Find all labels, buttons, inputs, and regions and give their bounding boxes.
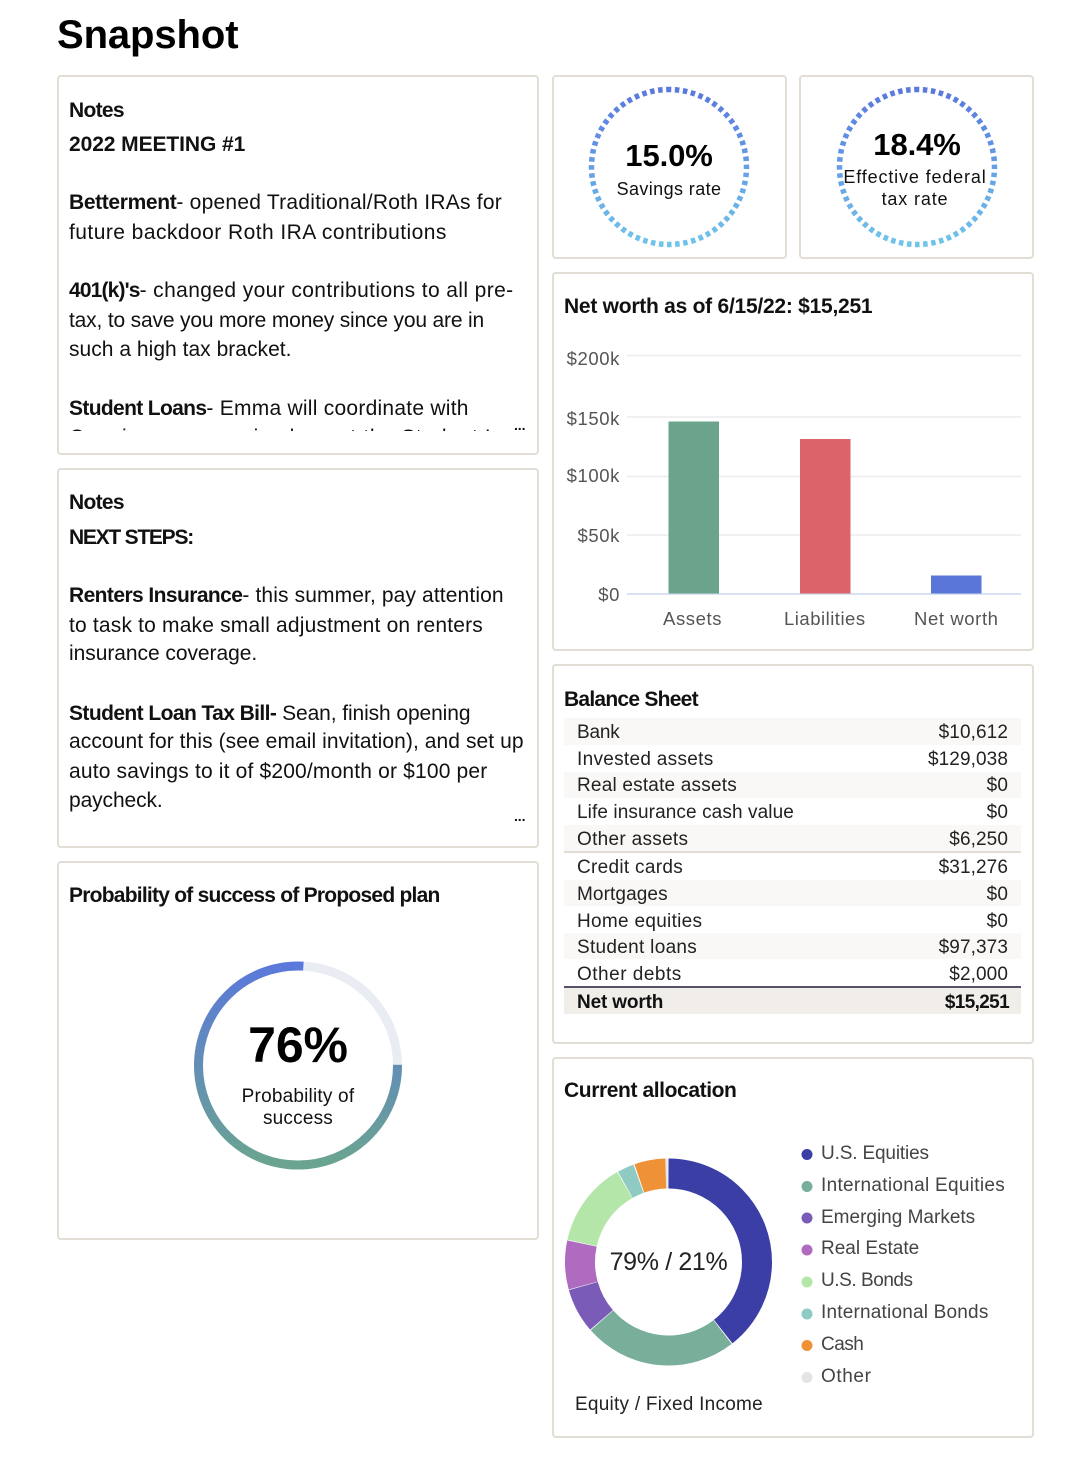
tax rate label: tax rate — [882, 189, 948, 209]
next steps text: Student Loan Tax Bill- Sean, finish opening — [69, 702, 470, 725]
balance sheet table: Other debts — [577, 964, 682, 985]
y axis labels — [566, 348, 620, 605]
meeting notes text: 2022 MEETING #1 — [69, 133, 245, 156]
balance sheet table: $129,038 — [928, 749, 1008, 770]
tax rate ring — [840, 90, 994, 244]
y axis labels: $100k — [567, 465, 620, 486]
meeting notes text: Notes — [69, 99, 124, 122]
next steps text: insurance coverage. — [69, 642, 257, 665]
balance sheet table: $0 — [987, 802, 1008, 823]
next steps text: ... — [514, 808, 525, 824]
ellipsis: ... — [514, 417, 525, 433]
panel: savings rate — [552, 75, 787, 259]
balance sheet table: Real estate assets — [577, 775, 737, 796]
probability label: Probability of — [242, 1086, 354, 1107]
meeting notes text: 401(k)'s- changed your contributions to all pre- — [69, 279, 514, 302]
allocation legend: Emerging Markets — [821, 1207, 975, 1228]
meeting notes text: tax, to save you more money since you are in — [69, 309, 484, 332]
balance sheet table — [564, 718, 1021, 1014]
next steps text: Renters Insurance- this summer, pay attention — [69, 584, 504, 607]
allocation legend: Other — [821, 1366, 872, 1387]
savings rate value: 15.0% — [625, 138, 713, 173]
balance sheet table: $97,373 — [939, 937, 1008, 958]
next steps text — [69, 491, 525, 824]
panel: effective federal tax rate — [799, 75, 1034, 259]
balance sheet table: Home equities — [577, 911, 702, 932]
probability ring — [192, 959, 404, 1172]
y axis labels: $50k — [577, 525, 620, 546]
balance sheet table: $15,251 — [945, 992, 1009, 1013]
bar chart — [627, 356, 1021, 594]
y axis labels: $0 — [598, 584, 620, 605]
probability heading: Probability of success of Proposed plan — [69, 884, 440, 907]
balance sheet table: Mortgages — [577, 884, 668, 905]
tax rate value: 18.4% — [873, 127, 961, 162]
meeting notes text: future backdoor Roth IRA contributions — [69, 221, 447, 244]
x axis labels: Liabilities — [784, 608, 866, 629]
balance sheet table: $2,000 — [949, 964, 1008, 985]
probability value: 76% — [248, 1017, 348, 1073]
tax rate label: Effective federal — [843, 167, 987, 187]
panel: next steps notes — [57, 468, 539, 848]
balance sheet heading: Balance Sheet — [564, 688, 698, 711]
y axis labels: $150k — [567, 408, 620, 429]
balance sheet table: Bank — [577, 722, 620, 743]
bar: liabilities — [800, 439, 850, 594]
allocation legend: International Equities — [821, 1175, 1005, 1196]
allocation legend: International Bonds — [821, 1302, 989, 1323]
allocation legend — [821, 1143, 1005, 1387]
meeting notes text: Betterment- opened Traditional/Roth IRAs for — [69, 191, 502, 214]
savings rate ring — [592, 90, 746, 244]
next steps text: NEXT STEPS: — [69, 526, 193, 549]
balance sheet table: $0 — [987, 884, 1008, 905]
next steps text: auto savings to it of $200/month or $100 per — [69, 760, 487, 783]
balance sheet table: Credit cards — [577, 857, 683, 878]
x axis labels — [663, 608, 999, 629]
donut center label: 79% / 21% — [610, 1248, 727, 1276]
legend dots — [802, 1149, 812, 1383]
balance sheet table: $31,276 — [939, 857, 1008, 878]
panel: meeting notes — [57, 75, 539, 455]
title: Snapshot — [57, 13, 238, 57]
meeting notes text — [69, 99, 535, 431]
allocation legend: Real Estate — [821, 1238, 919, 1259]
balance sheet table: $10,612 — [939, 722, 1008, 743]
meeting notes text: Student Loans- Emma will coordinate with — [69, 397, 469, 420]
next steps text: to task to make small adjustment on renters — [69, 614, 483, 637]
balance sheet table: Student loans — [577, 937, 697, 958]
balance sheet table: Invested assets — [577, 749, 714, 770]
panel: balance sheet — [552, 664, 1034, 1044]
allocation legend: U.S. Bonds — [821, 1270, 913, 1291]
next steps text: Notes — [69, 491, 124, 514]
next steps text: paycheck. — [69, 789, 163, 812]
balance sheet table: Life insurance cash value — [577, 802, 794, 823]
panel: probability of success — [57, 861, 539, 1240]
x axis labels: Assets — [663, 608, 722, 629]
donut caption: Equity / Fixed Income — [575, 1394, 763, 1415]
tax rate label — [843, 167, 987, 209]
next steps text: account for this (see email invitation), and set up — [69, 730, 524, 753]
allocation legend: U.S. Equities — [821, 1143, 929, 1164]
balance sheet table: Net worth — [577, 992, 663, 1013]
balance sheet table: $6,250 — [949, 829, 1008, 850]
allocation legend: Cash — [821, 1334, 863, 1355]
meeting notes text: such a high tax bracket. — [69, 338, 292, 361]
x axis labels: Net worth — [914, 608, 999, 629]
probability label: success — [263, 1108, 333, 1129]
probability label — [242, 1086, 354, 1129]
panel: net worth chart — [552, 272, 1034, 651]
allocation heading: Current allocation — [564, 1079, 736, 1102]
panel: current allocation — [552, 1057, 1034, 1438]
allocation donut — [544, 1137, 793, 1387]
balance sheet table: Other assets — [577, 829, 688, 850]
bar: assets — [668, 422, 719, 594]
y axis labels: $200k — [567, 348, 620, 369]
bar: net worth — [931, 576, 982, 594]
balance sheet table: $0 — [987, 775, 1008, 796]
savings rate label: Savings rate — [617, 179, 721, 199]
net worth heading: Net worth as of 6/15/22: $15,251 — [564, 295, 872, 318]
balance sheet table: $0 — [987, 911, 1008, 932]
